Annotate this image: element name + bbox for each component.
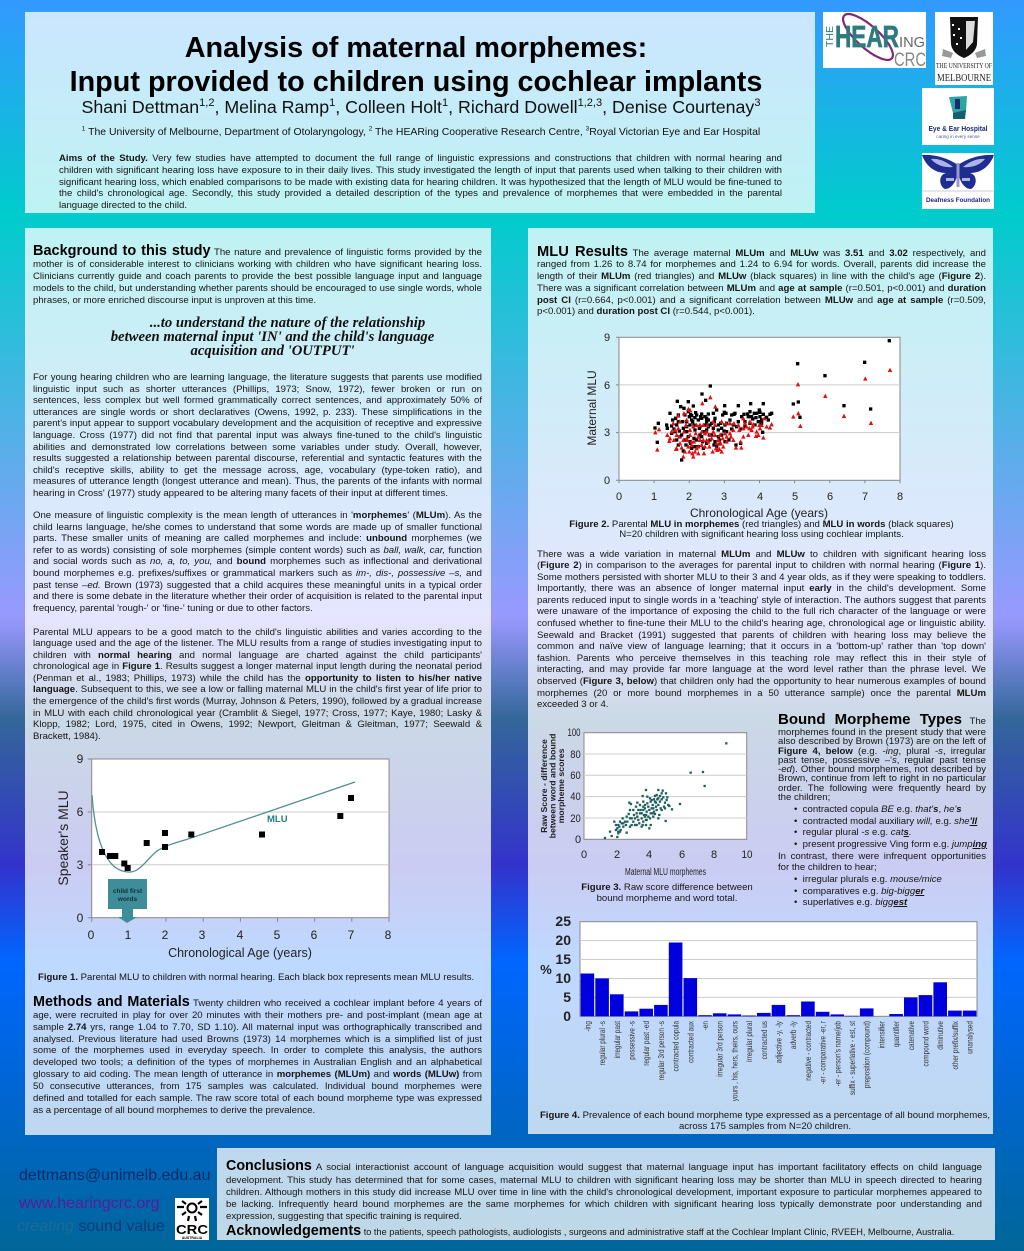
text block: conclusions: development. This study has determined that for some cases, maternal MLU to children with significant hearing loss may be shorter than MLU in speech directed to hearing	[226, 1174, 982, 1186]
chart: figure 1 parental MLU: 7	[348, 928, 355, 942]
text block: linguistic complexity: and there is some debate in the literature whether their order of acquisition is related to the parental input	[33, 591, 482, 602]
text block: parental MLU: children with normal hearing and normal language are charted against the child participants'	[33, 650, 482, 661]
logo: CRC Australia: AUSTRALIA	[182, 1236, 203, 1240]
caption: figure 4: Figure 4. Prevalence of each bound morpheme type expressed as a percentage of all bound morphemes,	[540, 1110, 990, 1121]
text block: young hearing children: abilities and demonstrated low correlations between some variables under study. Overall, however,	[33, 442, 482, 453]
text block: MLU results: ranged from 1.26 to 8.74 for morphemes and 1.24 to 6.94 for words. Overall, parents did increase the	[537, 259, 986, 270]
text block: parental MLU: language used and the age of the listener. The MLU results from a range of studies investigating input to	[33, 638, 482, 649]
text block: variation in maternal MLU: interacting, and may provide far more language at the word level rather than the phrase level. We	[537, 664, 986, 675]
logo: HEARing CRC	[823, 12, 926, 71]
chart: figure 3 raw score scatter: Raw Score - difference	[539, 739, 549, 833]
chart: figure 4 bound morpheme prevalence: regular 3rd person -s	[656, 1021, 666, 1080]
bullet list: frequently heard: • contracted modal auxiliary will, e.g. she'll	[794, 816, 977, 827]
text block: bound morpheme types: morphemes found in the present study that were	[778, 727, 986, 738]
text block: young hearing children	[33, 372, 482, 499]
chart: figure 1 parental MLU: 3	[199, 928, 206, 942]
chart: figure 3 raw score scatter: Maternal MLU morphemes	[625, 867, 706, 878]
text block: young hearing children: hearing in Cross' (1977) study appeared to be altering many facets of their input at different times.	[33, 488, 448, 499]
text block: variation in maternal MLU: common and naïve view of language learning; that it occurs in a 'bottom-up' rather than 'top down'	[537, 641, 986, 652]
chart: figure 3 raw score scatter: 4	[646, 849, 652, 861]
caption: figure 2	[569, 519, 954, 540]
chart: figure 4 bound morpheme prevalence: suffix - superlative - est, st	[847, 1021, 857, 1095]
contact: email: dettmans@unimelb.edu.au	[19, 1167, 210, 1184]
chart: figure 3 raw score scatter: 6	[679, 849, 685, 861]
chart: figure 4 bound morpheme prevalence: compound word	[921, 1021, 931, 1066]
chart: figure 3 raw score scatter: 0	[575, 834, 581, 846]
chart: figure 2 maternal MLU scatter: 3	[604, 427, 610, 439]
chart: figure 1 parental MLU: child first	[113, 888, 143, 895]
chart: figure 3 raw score scatter: morpheme scores	[556, 748, 566, 823]
panel: background, methods (left column)	[25, 228, 491, 1135]
chart: figure 2 maternal MLU scatter: 6	[827, 491, 833, 503]
logo: HEARing CRC: ING	[899, 34, 925, 51]
text block: linguistic complexity: past tense –ed. Brown (1973) suggested that a child acquires these meaningful units in a typical order	[33, 580, 482, 591]
text block: variation in maternal MLU: Seewald and Bracket (1991) suggested that parents of children with hearing loss may believe the	[537, 630, 986, 641]
text block: parental MLU: Brackett, 1984).	[33, 731, 101, 742]
text block: bound morpheme types: for the children to hear;	[778, 862, 877, 873]
chart: figure 4 bound morpheme prevalence	[540, 913, 978, 1102]
title	[70, 32, 762, 98]
chart: figure 2 maternal MLU scatter: 6	[604, 380, 610, 392]
chart: figure 3 raw score scatter: 0	[581, 849, 587, 861]
chart: figure 4 bound morpheme prevalence: irregular past	[612, 1021, 622, 1058]
chart: figure 4 bound morpheme prevalence: -ing	[583, 1021, 593, 1032]
text block: variation in maternal MLU: exceeded 3 or 4.	[537, 699, 608, 710]
callout: relationship statement: between maternal input 'IN' and the child's language	[111, 329, 434, 345]
chart: figure 4 bound morpheme prevalence: 0	[563, 1008, 571, 1024]
black squares	[653, 339, 891, 462]
logo: University of Melbourne: THE UNIVERSITY OF	[936, 62, 992, 70]
text block: methods and materials: some of the morphemes used in everyday speech. In order to complete this analysis, the authors	[33, 1045, 482, 1056]
chart: figure 2 maternal MLU scatter: 7	[862, 491, 868, 503]
chart: figure 4 bound morpheme prevalence: %	[540, 962, 552, 977]
chart: figure 4 bound morpheme prevalence: -er - comparative -er, r	[818, 1020, 828, 1084]
chart: figure 3 raw score scatter: 60	[570, 770, 581, 782]
chart: figure 4 bound morpheme prevalence: 15	[555, 951, 571, 967]
chart: figure 4 bound morpheme prevalence: contracted copula	[671, 1020, 681, 1071]
logo: Eye and Ear Hospital	[922, 88, 994, 145]
text block: methods and materials: Methods and Materials Twenty children who received a cochlear implant before 4 years of	[33, 994, 482, 1010]
text block: MLU results: There was a significant correlation between MLUm and age at sample (r=0.501, p<0.001) and duration	[537, 283, 986, 294]
logo: HEARing CRC: HEAR	[835, 19, 899, 54]
text block: variation in maternal MLU: confused whether to fine-tune their MLU to the child's hearing age, chronological age or linguistic ability.	[537, 618, 986, 629]
text block: bound morpheme types: In contrast, there were infrequent opportunities	[778, 851, 986, 862]
chart: figure 2 maternal MLU scatter: 1	[651, 491, 657, 503]
text block: variation in maternal MLU: There was a wide variation in maternal MLUm and MLUw to children with significant hearing loss	[537, 548, 986, 560]
text block: acknowledgements: Acknowledgements to the patients, speech pathologists, audiologists , surgeons and administrative staff at the Cochlear Implant Clinic, RVEEH, Melbourne, Australia.	[226, 1223, 954, 1239]
text block: background to this study: models to the child, but understanding whether parents should be encouraged to use single words, whole	[33, 283, 482, 294]
text block: MLU results: MLU Results The average maternal MLUm and MLUw was 3.51 and 3.02 respectively, and	[537, 244, 986, 260]
logo: Eye and Ear Hospital: caring in every sense	[936, 134, 980, 139]
text block: bound morpheme types: Figure 4, below (e.g. -ing, plural -s, irregular	[778, 746, 986, 757]
chart: figure 3 raw score scatter: 20	[570, 813, 581, 825]
chart: figure 3 raw score scatter: 2	[614, 849, 620, 861]
chart: figure 1 parental MLU: 8	[385, 928, 392, 942]
text block: young hearing children: child's receptive skills, ability to get the message across, age, vocabulary (type-token ratio), and	[33, 465, 482, 476]
chart: figure 2 maternal MLU scatter: 2	[686, 491, 692, 503]
bullet list: infrequently heard: • irregular plurals e.g. mouse/mice	[794, 874, 942, 885]
panel: conclusions	[217, 1148, 995, 1240]
text block: background to this study: phrases, or more enriched discourse input is unproven at this time.	[33, 295, 316, 306]
chart: figure 3 raw score scatter: 80	[570, 749, 581, 761]
caption: figure 1: Figure 1. Parental MLU to children with normal hearing. Each black box represents mean MLU results.	[38, 972, 474, 983]
bullet list: frequently heard: • regular plural -s e.g. cats.	[794, 827, 912, 838]
chart: figure 4 bound morpheme prevalence: other prefix/suffix	[950, 1021, 960, 1070]
callout: relationship statement: acquisition and 'OUTPUT'	[190, 343, 355, 359]
text block: parental MLU: in MLU with each child chronological year (Cramblit & Siegel, 1977; Cross, 1977; Kaye, 1980; Lasky &	[33, 708, 482, 719]
bullet list: infrequently heard: • comparatives e.g. big-bigger	[794, 886, 924, 896]
panel: results (right column)	[528, 228, 993, 1134]
text block: bound morpheme types: -ed). Other bound morphemes, not described by	[778, 764, 986, 775]
text block: conclusions: Conclusions A social interactionist account of language acquisition would suggest that maternal language input has important facilitatory effects on child language	[226, 1158, 982, 1174]
text block: young hearing children: measures of utterance length (longest utterance and mean). Thus, the parents of the infants with normal	[33, 476, 482, 487]
text block: young hearing children: parent's input appear to support vocabulary development and the acquisition of receptive and expressive	[33, 418, 482, 429]
text block: background to this study: Background to this study The nature and prevalence of linguistic forms provided by the	[33, 243, 482, 259]
text block: young hearing children: language. Cross (1977) did not find that parental input was always fine-tuned to the child's linguistic	[33, 430, 482, 441]
text block: linguistic complexity: One measure of linguistic complexity is the mean length of utterances in 'morphemes' (MLUm). As the	[33, 510, 482, 521]
text block: methods and materials: age, were recruited in play for over 20 minutes with their mothers pre- and post-implant (mean age at	[33, 1010, 482, 1021]
chart: figure 4 bound morpheme prevalence: 10	[555, 970, 571, 986]
chart: figure 1 parental MLU: 2	[162, 928, 169, 942]
text block: aims of the study: Aims of the Study. Very few studies have attempted to document the full range of linguistic expressions and constructions that children with normal hearing and	[59, 153, 782, 164]
logo: CRC Australia	[175, 1198, 209, 1240]
chart: figure 4 bound morpheme prevalence: quantifier	[891, 1020, 901, 1047]
text block: young hearing children: sentences, less complex but well formed grammatically correct sentences, and approximately 50% of	[33, 395, 482, 406]
logo: Deafness Foundation: Deafness Foundation	[926, 197, 990, 204]
chart: figure 3 raw score scatter	[539, 727, 752, 878]
logo: Eye and Ear Hospital: Eye & Ear Hospital	[928, 126, 988, 133]
text block: background to this study: mother is of considerable interest to clinicians working with children who have significant hearing loss.	[33, 259, 482, 270]
bullet list: frequently heard: • contracted copula BE e.g. that's, he's	[794, 804, 962, 815]
text block: linguistic complexity: frequency, parental 'rough-' or 'fine-' tuning or due to other factors.	[33, 603, 313, 614]
chart: figure 1 parental MLU: MLU	[267, 814, 288, 825]
chart: figure 4 bound morpheme prevalence: preposition (compound)	[862, 1021, 872, 1088]
text block: linguistic complexity: and social words such as no, a, to, you, and bound morphemes such as inflectional and derivational	[33, 556, 482, 567]
chart: figure 2 maternal MLU scatter	[585, 332, 903, 520]
bullet list: infrequently heard	[794, 874, 942, 908]
text block: bound morpheme types: Bound Morpheme Types The	[778, 711, 986, 728]
text block: variation in maternal MLU: parents reduced input to single words in a 'teaching' style of interaction. The authors suggest that parents	[537, 595, 986, 606]
chart: figure 2 maternal MLU scatter: 5	[792, 491, 798, 503]
text block: young hearing children: For young hearing children who are learning language, the literature suggests that parents use modified	[33, 372, 482, 383]
affiliations: 1 The University of Melbourne, Department of Otolaryngology, 2 The HEARing Cooperative Research Centre, 3Royal Victorian Eye and Ear Hospital	[82, 126, 760, 138]
logo: Deafness Foundation	[922, 153, 994, 209]
callout: relationship statement: ...to understand the nature of the relationship	[150, 315, 425, 331]
text block: aims of the study: the child's chronological age. Secondly, this study provided a detailed description of the types and prevalence of morphemes that were embedded in the parental	[59, 188, 782, 199]
logo: HEARing CRC: THE	[825, 26, 836, 47]
chart: figure 4 bound morpheme prevalence: -en	[700, 1021, 710, 1030]
text block: parental MLU: Klopp, 1982; Lord, 1975, cited in Owens, 1992; Newport, Gleitman & Gleitman, 1977; Seewald &	[33, 719, 482, 730]
text block: MLU results: post CI (r=0.664, p<0.001) and a significant correlation between MLUw and age at sample (r=0.509,	[537, 295, 986, 306]
caption: figure 3: bound morpheme and word total.	[597, 893, 737, 904]
chart: figure 4 bound morpheme prevalence: -er - person's name/job	[833, 1021, 843, 1087]
text block: linguistic complexity: refer to as words) consisting of sole morphemes (simple content words) such as ball, walk, car, function	[33, 545, 482, 556]
chart: figure 3 raw score scatter: 40	[570, 791, 581, 803]
caption: figure 2: N=20 children with significant hearing loss using cochlear implants.	[619, 528, 904, 540]
callout: relationship statement	[111, 315, 434, 359]
text block: linguistic complexity	[33, 510, 482, 614]
bullet list: frequently heard: • present progressive Ving form e.g. jumping	[794, 839, 987, 850]
title: Input provided to children using cochlear implants	[70, 66, 762, 98]
text block: bound morpheme types: the children;	[778, 792, 830, 803]
teal scatter points	[604, 742, 727, 839]
chart: figure 1 parental MLU	[55, 752, 392, 960]
chart: figure 1 parental MLU: 9	[77, 752, 84, 766]
chart: figure 1 parental MLU: words	[117, 896, 137, 903]
chart: figure 2 maternal MLU scatter: 0	[604, 475, 610, 487]
logo: University of Melbourne: MELBOURNE	[937, 73, 991, 84]
text block: conclusions	[226, 1158, 982, 1222]
chart: figure 3 raw score scatter: 100	[568, 727, 580, 739]
text block: aims of the study	[59, 153, 782, 211]
text block: variation in maternal MLU: Some mothers persisted with shorter MLU to their 3 and 4 year olds, as if they were speaking to toddlers.	[537, 572, 986, 583]
text block: young hearing children: linguistic input such as shorter utterances (Phillips, 1973; Snow, 1972), fewer broken or run on	[33, 384, 482, 395]
text block: methods and materials: defined and totalled for each sample. The raw score total of each bound morpheme type was expressed	[33, 1093, 482, 1104]
text block: methods and materials: developed two tools; a definition of the types of morphemes in Australian English and an alphabetical	[33, 1057, 482, 1068]
chart: figure 4 bound morpheme prevalence: possessive -s	[627, 1021, 637, 1060]
chart: figure 3 raw score scatter: between word and bound	[548, 734, 558, 838]
text block: linguistic complexity: parts. These smaller units of meaning are called morphemes and include: unbound morphemes (we	[33, 533, 482, 544]
text block: parental MLU: language. Subsequent to this, we see a low or falling maternal MLU in the child's first year of life prior to	[33, 684, 482, 695]
chart: figure 4 bound morpheme prevalence: adverb -ly	[788, 1021, 798, 1049]
text block: bound morpheme types: Brown, continue from left to right in no particular	[778, 773, 986, 784]
title: Analysis of maternal morphemes:	[185, 32, 647, 64]
chart: figure 4 bound morpheme prevalence: 20	[555, 932, 571, 948]
chart: figure 2 maternal MLU scatter: 3	[721, 491, 727, 503]
chart: figure 1 parental MLU: 0	[77, 911, 84, 925]
logo: HEARing CRC: CRC	[894, 50, 926, 71]
red triangles	[654, 368, 892, 458]
text block: MLU results	[537, 244, 986, 317]
text block: methods and materials: analysed. Previous literature had used Browns (1973) 14 morphemes which is a simplified list of just	[33, 1034, 482, 1045]
text block: variation in maternal MLU: morphemes (20 or more bound morphemes in a 50 utterance sample) once the parental MLUm	[537, 688, 986, 699]
text block: methods and materials: 50 consecutive utterances, from 175 samples was calculated. Individual bound morphemes were	[33, 1081, 482, 1092]
text block: variation in maternal MLU: (Figure 2) in comparison to the averages for parental input to children with normal hearing (Figure 1).	[537, 560, 986, 571]
chart: figure 4 bound morpheme prevalence: regular plural -s	[597, 1021, 607, 1065]
chart: figure 1 parental MLU: 6	[77, 805, 84, 819]
bullet list: infrequently heard: • superlatives e.g. biggest	[794, 897, 907, 908]
text block: parental MLU: chronological age in Figure 1. Results suggest a longer maternal input length during the neonatal period	[33, 661, 482, 672]
text block: variation in maternal MLU	[537, 548, 986, 710]
text block: methods and materials: sample 2.74 yrs, range 1.04 to 7.70, SD 1.10). All maternal input was orthographically transcribed and	[33, 1022, 482, 1033]
chart: figure 4 bound morpheme prevalence: regular past -ed	[641, 1021, 651, 1066]
caption: figure 3	[581, 882, 753, 904]
text block: methods and materials: as a percentage of all bound morphemes to derive the prevalence.	[33, 1105, 315, 1116]
chart: figure 4 bound morpheme prevalence: contracted us	[759, 1021, 769, 1059]
chart: figure 4 bound morpheme prevalence: 25	[555, 913, 571, 929]
text block: parental MLU: the emergence of the child's first words (Murray, Johnson & Peters, 1990), followed by a gradual increase	[33, 696, 482, 707]
chart: figure 1 parental MLU: 6	[311, 928, 318, 942]
caption: figure 4: across 175 samples from N=20 children.	[679, 1121, 851, 1132]
chart: figure 4 bound morpheme prevalence: irregular 3rd person	[715, 1021, 725, 1077]
chart: figure 3 raw score scatter: 10	[742, 849, 752, 861]
text block: young hearing children: results suggested a relationship between parental discourse, referential and syntactic features with the	[33, 453, 482, 464]
text block: aims of the study: significant hearing loss, which enabled comparisons to be made with existing data for hearing children. It was hypothesized that the length of MLU would be fine-tuned to	[59, 177, 782, 188]
text block: methods and materials	[33, 994, 482, 1116]
caption: figure 4	[540, 1110, 990, 1132]
chart: figure 3 raw score scatter: 8	[711, 849, 717, 861]
text block: methods and materials: glossary to aid coding. The mean length of utterance in morphemes (MLUm) and words (MLUw) from	[33, 1069, 482, 1080]
text block: background to this study	[33, 243, 482, 306]
contact: website: www.hearingcrc.org	[19, 1195, 160, 1212]
text block: linguistic complexity: child learns language, he/she comes to understand that some words are made up of smaller functional	[33, 522, 482, 533]
chart: figure 2 maternal MLU scatter: Maternal MLU	[585, 370, 599, 446]
text block: MLU results: p<0.001) and duration post CI (r=0.544, p<0.001).	[537, 306, 755, 317]
text block: variation in maternal MLU: fashion. Parents who perceive themselves in this teaching role may reflect this in their style of	[537, 653, 986, 664]
chart: figure 4 bound morpheme prevalence: yours , his, hers, theirs, ours	[730, 1021, 740, 1101]
chart: figure 1 parental MLU: 3	[77, 858, 84, 872]
chart: figure 2 maternal MLU scatter: 9	[604, 332, 610, 344]
logo: University of Melbourne	[935, 12, 993, 85]
chart: figure 1 parental MLU: Chronological Age (years)	[168, 946, 312, 960]
text block: background to this study: Clinicians currently guide and coach parents to provide the best possible language input and language	[33, 271, 482, 282]
chart: figure 4 bound morpheme prevalence: intensifier	[877, 1020, 887, 1048]
chart: figure 2 maternal MLU scatter: 0	[616, 491, 622, 503]
caption: figure 3: Figure 3. Raw score difference between	[581, 882, 753, 893]
text block: parental MLU: Parental MLU appears to be a good match to the child's linguistic abilities and varies according to the	[33, 626, 482, 638]
text block: variation in maternal MLU: Importantly, there was an absence of longer maternal input early in the child's development. Some	[537, 583, 986, 594]
chart: figure 2 maternal MLU scatter: 4	[757, 491, 763, 503]
text block: MLU results: length of their MLUm (red triangles) and MLUw (black squares) in line with the child's age (Figure 2).	[537, 271, 986, 282]
text block: variation in maternal MLU: were unaware of the importance of exposing the child to the full rich character of the language or were	[537, 606, 986, 617]
chart: figure 4 bound morpheme prevalence: unanalysed	[965, 1021, 975, 1054]
chart: figure 4 bound morpheme prevalence: contracted aux	[686, 1021, 696, 1063]
chart: figure 2 maternal MLU scatter: Chronological Age (years)	[690, 506, 828, 520]
chart: figure 1 parental MLU: 0	[88, 928, 95, 942]
chart: figure 4 bound morpheme prevalence: 5	[563, 989, 571, 1005]
chart: figure 4 bound morpheme prevalence: diminutive	[935, 1021, 945, 1050]
chart: figure 1 parental MLU: 5	[274, 928, 281, 942]
panel: title and aims	[25, 12, 815, 213]
logo: CRC Australia: CRC	[176, 1223, 208, 1237]
caption: figure 2: Figure 2. Parental MLU in morphemes (red triangles) and MLU in words (black squares)	[569, 519, 954, 530]
text block: bound morpheme types: order. The following were frequently heard by	[778, 783, 986, 794]
chart: figure 1 parental MLU: 4	[237, 928, 244, 942]
chart: figure 1 parental MLU: Speaker's MLU	[55, 790, 71, 886]
text block: conclusions: children. Although mothers in this study did increase MLU over time in line with the child's chronological development, important exposure to particular morphemes appeared to	[226, 1186, 982, 1198]
text block: variation in maternal MLU: observed (Figure 3, below) that children only had the opportunity to hear numerous examples of bound	[537, 676, 986, 687]
chart: figure 1 parental MLU: 1	[125, 928, 132, 942]
chart: figure 4 bound morpheme prevalence: negative - contracted	[803, 1021, 813, 1081]
chart: figure 4 bound morpheme prevalence: adjective -y, -ly	[774, 1021, 784, 1063]
text block: aims of the study: children with significant hearing loss have exposure to in their daily lives. This study investigated the length of input that parents used when talking to their children with	[59, 165, 782, 176]
text block: young hearing children: utterances are single words or short declaratives (Owens, 1992, p. 233). These simplifications in the	[33, 407, 482, 418]
chart: figure 4 bound morpheme prevalence: irregular plural	[744, 1021, 754, 1062]
text block: bound morpheme types: also described by Brown (1973) are on the left of	[778, 736, 986, 747]
text block: bound morpheme types: past tense, possessive –'s, regular past tense	[778, 755, 986, 766]
chart: figure 2 maternal MLU scatter: 8	[897, 491, 903, 503]
text block: conclusions: be lacking. Infrequently heard bound morphemes are the same morphemes for which children with significant hearing loss typically demonstrate poor understanding and	[226, 1198, 982, 1210]
text block: aims of the study: language directed to the child.	[59, 200, 187, 211]
bullet list: frequently heard	[794, 804, 987, 850]
text block: bound morpheme types	[778, 711, 987, 908]
text block: conclusions: expression, suggesting that specific training is required.	[226, 1210, 462, 1222]
text block: parental MLU	[33, 626, 482, 742]
tagline: creating sound value: creating sound value	[17, 1218, 165, 1235]
text block: linguistic complexity: bound morphemes e.g. prefixes/suffixes or grammatical markers such as im-, dis-, possessive –s, and	[33, 568, 482, 579]
text block: parental MLU: (Penman et al., 1983; Phillips, 1973) while the child has the opportunity to listen to his/her native	[33, 673, 482, 684]
chart: figure 4 bound morpheme prevalence: catenative	[906, 1021, 916, 1050]
authors: Shani Dettman1,2, Melina Ramp1, Colleen Holt1, Richard Dowell1,2,3, Denise Courtenay3	[82, 97, 760, 117]
